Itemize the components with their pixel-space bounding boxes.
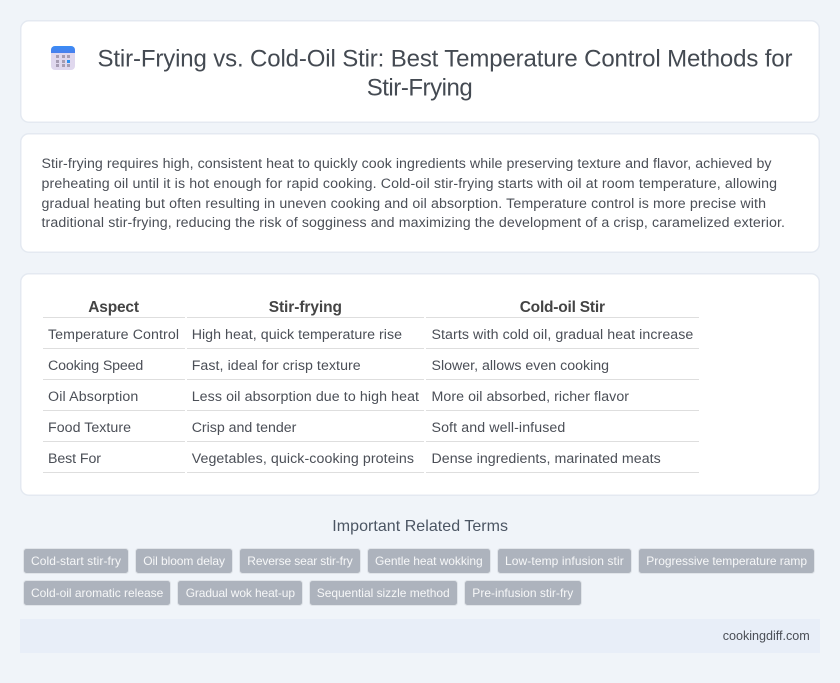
table row: oil absorption: More oil absorbed, richer flavor	[432, 389, 629, 405]
table row: cooking speed: Cooking Speed	[48, 358, 143, 374]
table row: best for: Vegetables, quick-cooking proteins	[192, 451, 414, 467]
table row: food texture	[48, 420, 565, 436]
table row: cooking speed: Slower, allows even cooking	[432, 358, 609, 374]
table row: cooking speed: Fast, ideal for crisp texture	[192, 358, 361, 374]
table row: best for: Best For	[48, 451, 101, 467]
table row: food texture: Crisp and tender	[192, 420, 297, 436]
panel: introduction text	[21, 134, 819, 252]
tag group: related terms	[24, 548, 814, 606]
tag: cold-start stir-fry	[24, 548, 128, 574]
tag: cold-oil aromatic release	[24, 580, 170, 606]
table header row: Aspect	[88, 299, 139, 316]
table header row: Stir-frying	[269, 299, 342, 316]
tag: low-temp infusion stir	[498, 548, 632, 574]
text block: intro paragraph: preheating oil until it is hot enough for rapid cooking. Cold-oil stir-frying starts with oil at room temperature, allowing	[42, 176, 777, 192]
tag: progressive temperature ramp: Progressive temperature ramp	[646, 554, 807, 568]
table row: temperature control: High heat, quick temperature rise	[192, 327, 402, 343]
footer bar	[20, 619, 820, 653]
panel: title header	[21, 21, 819, 122]
tag: oil bloom delay	[136, 548, 232, 574]
tag: progressive temperature ramp	[638, 548, 814, 574]
tag: reverse sear stir-fry: Reverse sear stir-fry	[247, 554, 353, 568]
tag: gradual wok heat-up: Gradual wok heat-up	[186, 586, 295, 600]
table row: temperature control: Starts with cold oil, gradual heat increase	[432, 327, 693, 343]
tag: gentle heat wokking	[368, 548, 490, 574]
tag: low-temp infusion stir: Low-temp infusion stir	[505, 554, 624, 568]
table row: temperature control	[48, 327, 693, 343]
title	[98, 46, 792, 102]
tag: gradual wok heat-up	[178, 580, 302, 606]
table header row	[88, 299, 605, 316]
tag: oil bloom delay: Oil bloom delay	[143, 554, 225, 568]
panel: comparison table	[21, 274, 819, 495]
tag: reverse sear stir-fry	[240, 548, 360, 574]
tag: cold-start stir-fry: Cold-start stir-fry	[31, 554, 121, 568]
heading: important related terms: Important Related Terms	[332, 518, 508, 535]
text block: intro paragraph	[42, 156, 785, 231]
title: Stir-Frying	[367, 74, 473, 102]
table row: best for	[48, 451, 661, 467]
text block: intro paragraph: traditional stir-frying, reducing the risk of sogginess and maximizing the development of a crisp, caramelized exterior.	[42, 215, 785, 231]
tag: pre-infusion stir-fry	[464, 580, 582, 606]
table row: best for: Dense ingredients, marinated meats	[432, 451, 661, 467]
table row: oil absorption	[48, 389, 629, 405]
footer bar: cookingdiff.com	[723, 629, 810, 643]
tag: sequential sizzle method	[310, 580, 458, 606]
icon: calendar grid	[51, 46, 75, 70]
text block: intro paragraph: Stir-frying requires high, consistent heat to quickly cook ingredients while preserving texture and flavor, achieved by	[42, 156, 772, 172]
table row: oil absorption: Less oil absorption due to high heat	[192, 389, 419, 405]
table row: food texture: Food Texture	[48, 420, 131, 436]
tag: gentle heat wokking: Gentle heat wokking	[375, 554, 483, 568]
tag: cold-oil aromatic release: Cold-oil aromatic release	[31, 586, 164, 600]
table header row: Cold-oil Stir	[520, 299, 605, 316]
tag: sequential sizzle method: Sequential sizzle method	[317, 586, 450, 600]
table row: oil absorption: Oil Absorption	[48, 389, 138, 405]
title: Stir-Frying vs. Cold-Oil Stir: Best Temperature Control Methods for	[98, 46, 792, 72]
table row: temperature control: Temperature Control	[48, 327, 179, 343]
tag: pre-infusion stir-fry: Pre-infusion stir-fry	[472, 586, 573, 600]
table row: cooking speed	[48, 358, 609, 374]
text block: intro paragraph: gradual heating but often resulting in uneven cooking and oil absorption. Temperature control is more precise with	[42, 196, 766, 212]
table row: food texture: Soft and well-infused	[432, 420, 565, 436]
